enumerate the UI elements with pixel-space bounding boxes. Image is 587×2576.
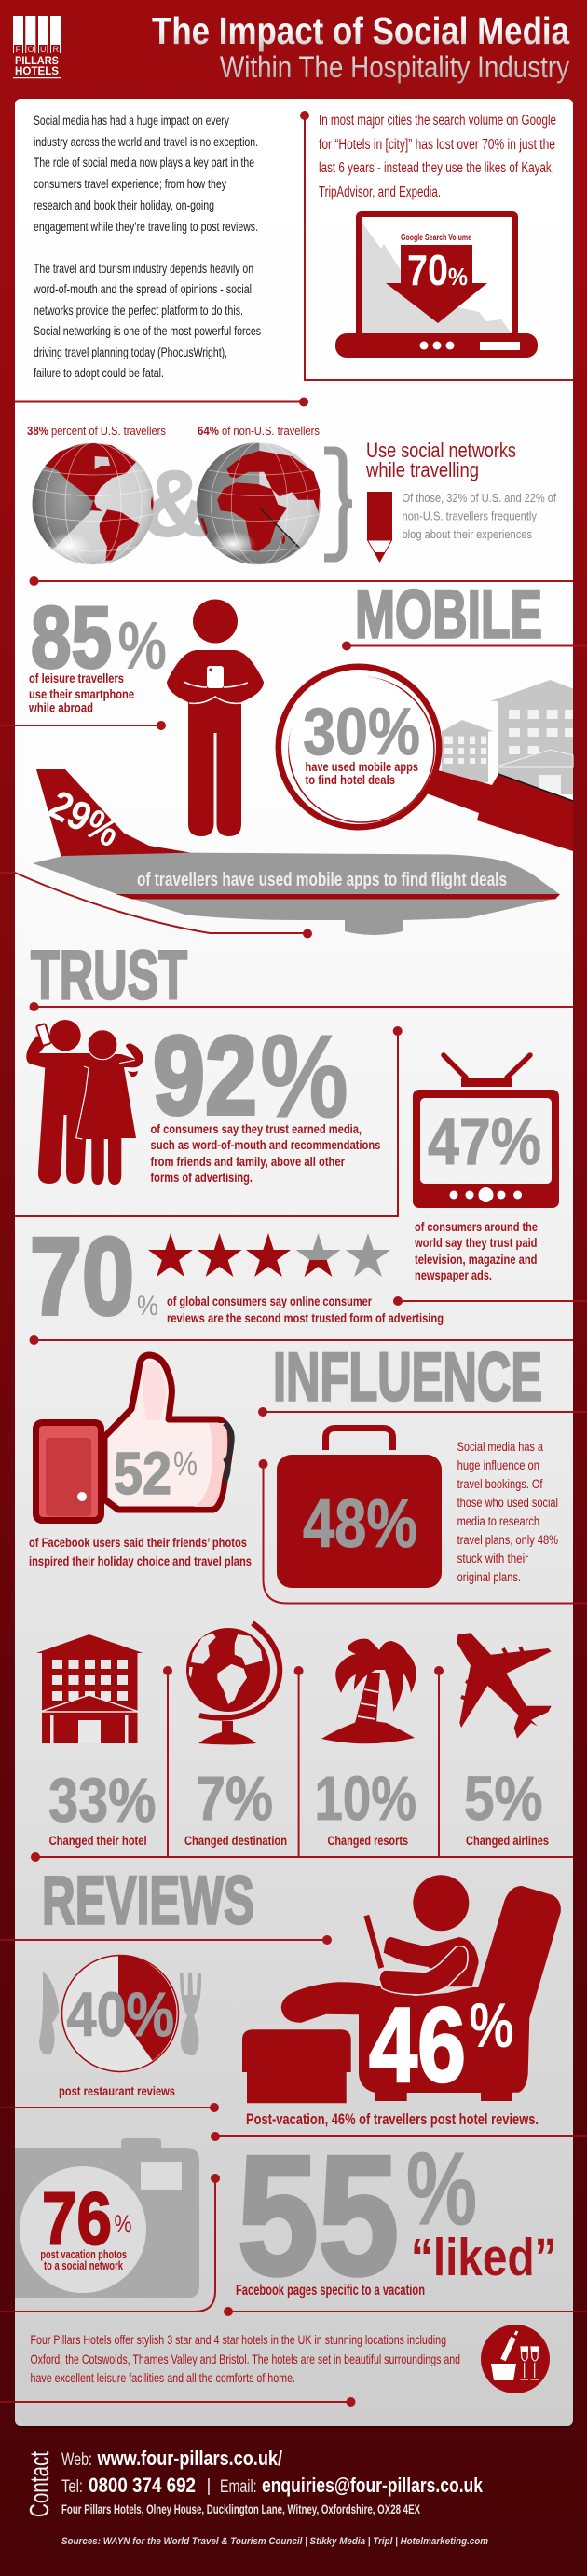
text: 52 percent facebook	[29, 1535, 252, 1568]
icon: champagne bucket	[481, 2325, 550, 2393]
text: social media influence	[457, 1440, 558, 1584]
web: Web:	[61, 2450, 92, 2470]
connector: 92 percent	[15, 1026, 403, 1216]
column: changed resorts: Changed resorts	[328, 1833, 408, 1848]
column: changed airlines	[457, 1633, 552, 1848]
stat: 85 percent smartphone: %	[117, 609, 167, 684]
icon: plate with 40 percent: 40%	[67, 1980, 174, 2050]
text: about four pillars hotels	[30, 2332, 460, 2385]
stat: 85 percent smartphone: while abroad	[28, 700, 93, 715]
stat: 85 percent smartphone: of leisure travellers	[29, 671, 124, 685]
stat: 55 percent liked: “liked”	[411, 2228, 557, 2287]
intro text: research and book their holiday, on-going	[34, 198, 214, 212]
text: 70 percent reviews	[167, 1294, 444, 1325]
logo: Four Pillars Hotels: PILLARS	[15, 56, 59, 67]
icon: airliner with 29 percent: 29%	[42, 781, 128, 856]
icon: camera with 76 percent: to a social network	[44, 2258, 124, 2272]
icon: suitcase with 48 percent	[277, 1429, 442, 1588]
icon: magnifying glass	[276, 663, 573, 851]
google callout text: TripAdvisor, and Expedia.	[319, 184, 441, 200]
footer contact	[25, 2447, 488, 2547]
intro text: engagement while they’re travelling to post reviews.	[34, 220, 258, 234]
text: social media influence: original plans.	[457, 1570, 521, 1584]
text: social media influence: travel plans, only 48%	[457, 1533, 558, 1547]
logo: Four Pillars Hotels: HOTELS	[15, 66, 59, 77]
heading: trust: TRUST	[31, 937, 187, 1013]
connector: 85 percent	[15, 721, 166, 730]
stat: 55 percent liked: 55	[238, 2120, 399, 2310]
icon: suitcase with 48 percent: 48%	[303, 1486, 417, 1562]
connector: camera	[15, 2174, 220, 2312]
stat: 92 percent earned media: such as word-of-mouth and recommendations	[151, 1137, 381, 1152]
connector: about text	[15, 2397, 356, 2407]
text: social media influence: those who used social	[457, 1496, 558, 1510]
intro text: consumers travel experience; from how they	[34, 177, 226, 191]
icon: laptop with google search volume: %	[448, 263, 468, 291]
logo: Four Pillars Hotels: F	[15, 45, 21, 54]
heading: reviews: REVIEWS	[42, 1863, 254, 1939]
icon: pencil	[367, 492, 392, 562]
icon: camera with 76 percent: post vacation photos	[40, 2247, 127, 2261]
stat: 92 percent earned media: forms of advertising.	[151, 1170, 253, 1185]
telephone and email: |	[207, 2476, 211, 2496]
globe captions: 38%	[27, 424, 48, 438]
blogging text	[403, 491, 556, 541]
header	[13, 9, 570, 84]
telephone and email: 0800 374 692	[89, 2474, 196, 2497]
stat: 92 percent earned media: of consumers say they trust earned media,	[151, 1121, 362, 1136]
intro text: The role of social media now plays a key part in the	[34, 156, 254, 169]
connector: 70 percent	[393, 1296, 573, 1306]
telephone and email: Email:	[220, 2477, 257, 2497]
icon: person in armchair with 46 percent	[242, 1875, 561, 2105]
icon: hotel buildings	[442, 680, 573, 795]
text: about four pillars hotels: Four Pillars Hotels offer stylish 3 star and 4 star hotels in the UK in stunning locations including	[30, 2332, 446, 2347]
text: 47 percent paid ads: world say they trust paid	[414, 1235, 537, 1250]
connector: above 55 percent	[211, 2132, 573, 2141]
connector: google callout	[300, 111, 573, 380]
connector: social section	[15, 397, 308, 406]
icon: thumbs up with 52 percent	[33, 1355, 232, 1524]
text: 70 percent reviews: reviews are the second most trusted form of advertising	[167, 1310, 444, 1325]
intro text: The travel and tourism industry depends heavily on	[34, 262, 253, 276]
contact label: Contact	[25, 2451, 55, 2517]
icon: globe americas	[32, 442, 155, 564]
column: changed airlines: Changed airlines	[466, 1833, 549, 1848]
icon: thumbs up with 52 percent: 52	[114, 1440, 171, 1507]
brace	[324, 451, 352, 558]
connector: above mobile	[30, 576, 573, 586]
column: changed hotel: 33%	[48, 1766, 157, 1836]
address: Four Pillars Hotels, Olney House, Ducklington Lane, Witney, Oxfordshire, OX28 4EX	[61, 2502, 420, 2516]
column: changed airlines: 5%	[464, 1764, 542, 1834]
telephone and email: enquiries@four-pillars.co.uk	[262, 2474, 484, 2497]
blogging text: non-U.S. travellers frequently	[403, 508, 537, 523]
heading: use social networks: Use social networks	[366, 439, 516, 462]
icon: laptop with google search volume	[335, 211, 538, 358]
google callout text	[319, 113, 556, 200]
heading: use social networks: while travelling	[365, 458, 479, 481]
stat: 85 percent smartphone: 85	[31, 589, 112, 685]
text: social media influence: Social media has a	[457, 1440, 543, 1454]
icon: camera with 76 percent	[15, 2138, 199, 2298]
icon: person with phone	[167, 600, 264, 836]
column: changed destination	[184, 1623, 287, 1848]
logo: Four Pillars Hotels	[13, 16, 61, 78]
intro text	[33, 114, 261, 380]
icon: laptop with google search volume: Google Search Volume	[401, 232, 471, 243]
connector: below 55 percent	[224, 2307, 573, 2316]
icon: couple taking selfie	[26, 1020, 143, 1185]
text: 52 percent facebook: inspired their holiday choice and travel plans	[29, 1553, 252, 1568]
icon: plate with 40 percent	[39, 1956, 201, 2071]
column: changed hotel: Changed their hotel	[49, 1833, 147, 1848]
blogging text: blog about their experiences	[403, 527, 532, 541]
icon: laptop with google search volume: 70	[407, 246, 448, 294]
connector: below trust	[30, 1002, 573, 1011]
icon: camera with 76 percent: %	[114, 2210, 132, 2238]
connector: above influence	[30, 1335, 573, 1345]
telephone and email: Tel:	[61, 2477, 83, 2497]
logo: Four Pillars Hotels: U	[40, 45, 47, 54]
stat: 30 percent hotel deals: to find hotel deals	[306, 773, 395, 787]
stat: 92 percent earned media: 92	[153, 1013, 257, 1138]
icon: television with 47 percent: 47%	[428, 1105, 541, 1179]
globe captions	[27, 424, 320, 438]
ampersand: &	[142, 452, 209, 556]
icon: thumbs up with 52 percent: %	[173, 1444, 198, 1483]
blogging text: Of those, 32% of U.S. and 22% of	[403, 491, 556, 505]
globe captions: of non-U.S. travellers	[222, 424, 320, 438]
stat: 85 percent smartphone: use their smartphone	[29, 687, 134, 701]
intro text: industry across the world and travel is no exception.	[34, 135, 258, 149]
logo: Four Pillars Hotels: R	[52, 45, 60, 54]
text: 70 percent reviews: of global consumers say online consumer	[167, 1294, 372, 1308]
heading: use social networks	[365, 439, 516, 481]
text: social media influence: huge influence on	[457, 1458, 539, 1472]
icon: person in armchair with 46 percent: %	[470, 1990, 514, 2061]
stat: 55 percent liked: Facebook pages specific to a vacation	[236, 2283, 425, 2298]
connector: below reviews	[15, 1935, 332, 1945]
text: 47 percent paid ads: newspaper ads.	[415, 1268, 492, 1282]
globe captions: 64%	[198, 424, 219, 438]
icon: camera with 76 percent: 76	[42, 2177, 112, 2259]
telephone and email	[61, 2474, 484, 2497]
connector: column dividers	[31, 1666, 573, 1862]
connector: restaurant reviews	[15, 2103, 219, 2112]
text: 47 percent paid ads: television, magazine and	[415, 1252, 537, 1267]
stat: 55 percent liked	[236, 2120, 557, 2310]
text: post restaurant reviews: post restaurant reviews	[59, 2083, 175, 2098]
icon: television with 47 percent	[413, 1055, 559, 1208]
stat: 70 percent: 70	[30, 1215, 134, 1338]
stat: 92 percent earned media: %	[260, 1010, 348, 1142]
column: changed resorts	[315, 1639, 416, 1848]
text: 52 percent facebook: of Facebook users said their friends’ photos	[29, 1535, 247, 1550]
intro text: Social media has had a huge impact on every	[34, 114, 229, 128]
sources: Sources: WAYN for the World Travel & Tourism Council | Stikky Media | Tripl | Hotelmarketing.com	[61, 2536, 488, 2547]
intro text: word-of-mouth and the spread of opinions - social	[33, 282, 252, 296]
stat: 70 percent: %	[137, 1291, 158, 1322]
text: social media influence: stuck with their	[457, 1552, 528, 1566]
stat: 92 percent earned media	[151, 1010, 381, 1185]
stat: 92 percent earned media: from friends and family, above all other	[151, 1154, 345, 1169]
stars rating	[148, 1233, 390, 1277]
text: 47 percent paid ads: of consumers around the	[415, 1219, 538, 1234]
stat: 30 percent hotel deals: have used mobile apps	[306, 760, 418, 774]
connector: suitcase	[259, 1459, 573, 1604]
globe captions: percent of U.S. travellers	[51, 424, 166, 438]
column: changed hotel	[36, 1634, 157, 1848]
stat: 85 percent smartphone	[28, 589, 167, 715]
stat: 55 percent liked: %	[406, 2132, 477, 2246]
icon: person in armchair with 46 percent: 46	[369, 1986, 466, 2105]
icon: globe africa	[197, 442, 321, 564]
text: about four pillars hotels: have excellent leisure facilities and all the comforts of home.	[30, 2370, 295, 2385]
icon: airliner with 29 percent	[33, 769, 560, 935]
column: changed destination: 7%	[196, 1764, 273, 1834]
intro text: Social networking is one of the most powerful forces	[34, 324, 261, 338]
intro text: networks provide the perfect platform to do this.	[34, 304, 243, 318]
connector: below mobile	[342, 641, 573, 650]
text: social media influence: media to research	[457, 1514, 539, 1528]
intro text: driving travel planning today (PhocusWright),	[34, 346, 227, 359]
text: social media influence: travel bookings. Of	[457, 1477, 543, 1491]
logo: Four Pillars Hotels: O	[28, 45, 34, 54]
web: www.four-pillars.co.uk/	[97, 2447, 282, 2470]
column: changed resorts: 10%	[315, 1764, 416, 1834]
text: 47 percent paid ads	[414, 1219, 538, 1282]
connector: below influence	[258, 1407, 573, 1417]
column: changed destination: Changed destination	[184, 1833, 287, 1848]
text: about four pillars hotels: Oxford, the Cotswolds, Thames Valley and Bristol. The hotels are set in beautiful surroundings and	[30, 2352, 460, 2366]
stat: 30 percent hotel deals: 30%	[303, 696, 420, 769]
connector: flight	[15, 873, 312, 939]
intro text: failure to adopt could be fatal.	[34, 366, 164, 380]
